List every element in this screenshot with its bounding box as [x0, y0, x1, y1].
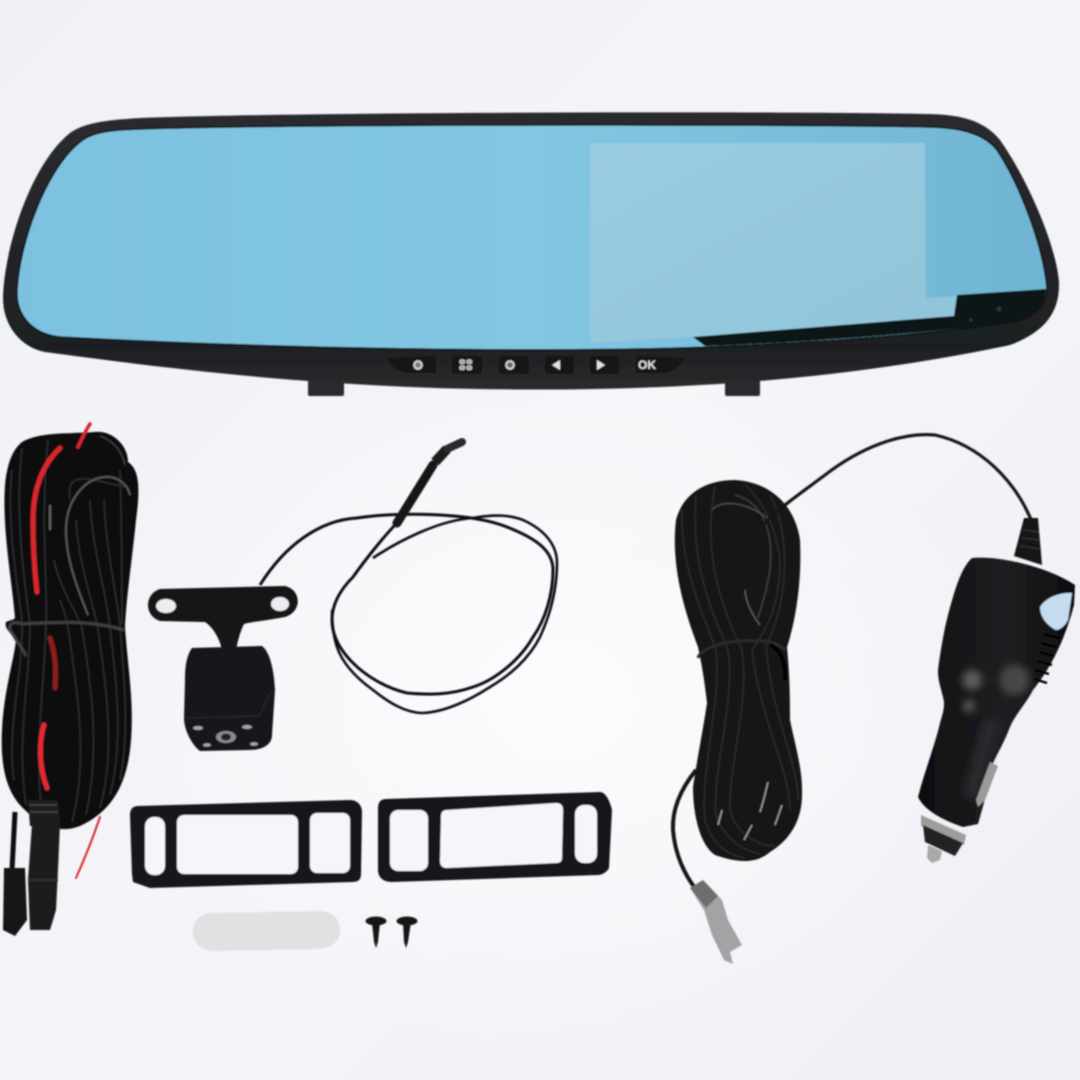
cable tie — [698, 641, 785, 658]
reflected screen panel — [590, 143, 957, 343]
icon: menu — [460, 360, 472, 370]
highlighted loop — [66, 477, 130, 615]
silicone mount bands — [130, 792, 612, 888]
charger body — [918, 558, 1075, 827]
camera body — [184, 646, 275, 751]
icon: power — [414, 361, 422, 369]
reverse camera — [148, 586, 298, 751]
individual cable strands — [10, 436, 130, 822]
light gaps at coil base — [718, 782, 782, 840]
GPS connector tip — [690, 880, 742, 964]
mounting bracket — [148, 586, 298, 650]
icon: left arrow — [552, 360, 560, 370]
metal tip — [921, 815, 966, 845]
warning sticker — [1040, 593, 1072, 630]
cable strand A — [260, 514, 553, 694]
car charger — [918, 518, 1075, 863]
screen lens dots — [969, 307, 1001, 322]
red wire — [33, 424, 100, 878]
mirror housing — [3, 112, 1059, 389]
camera LEDs — [193, 725, 258, 747]
cable coil mass — [2, 432, 138, 829]
strain relief — [1014, 518, 1042, 565]
metal clip — [976, 762, 998, 807]
cable tie — [10, 622, 124, 656]
power cable coil — [673, 435, 1032, 964]
connector plugs — [12, 812, 15, 870]
button strip — [387, 356, 685, 374]
rear-view mirror — [3, 112, 1059, 396]
body highlights — [962, 665, 1030, 800]
left band — [130, 800, 362, 888]
OK label: OK — [638, 358, 656, 372]
coil strands — [682, 484, 798, 858]
mounting clips — [308, 376, 760, 396]
right band — [378, 792, 612, 882]
trailing cable to tip — [673, 770, 696, 888]
plug body — [397, 465, 433, 523]
camera cable loop with plug — [260, 442, 557, 713]
button recesses — [387, 356, 436, 373]
coil mass — [675, 480, 802, 861]
icon: settings — [506, 361, 514, 369]
adhesive pad — [193, 911, 340, 951]
dark reflection corner — [693, 289, 1046, 346]
icon: right arrow — [597, 360, 605, 370]
mirror glass — [17, 125, 1047, 350]
strain relief — [28, 800, 60, 826]
long coiled camera cable with red wire — [2, 424, 138, 936]
trailing cable to charger — [741, 435, 1032, 566]
cable strand B — [332, 516, 557, 713]
plug tip — [435, 449, 447, 462]
vent ribs — [1034, 634, 1059, 683]
screws — [366, 916, 418, 948]
